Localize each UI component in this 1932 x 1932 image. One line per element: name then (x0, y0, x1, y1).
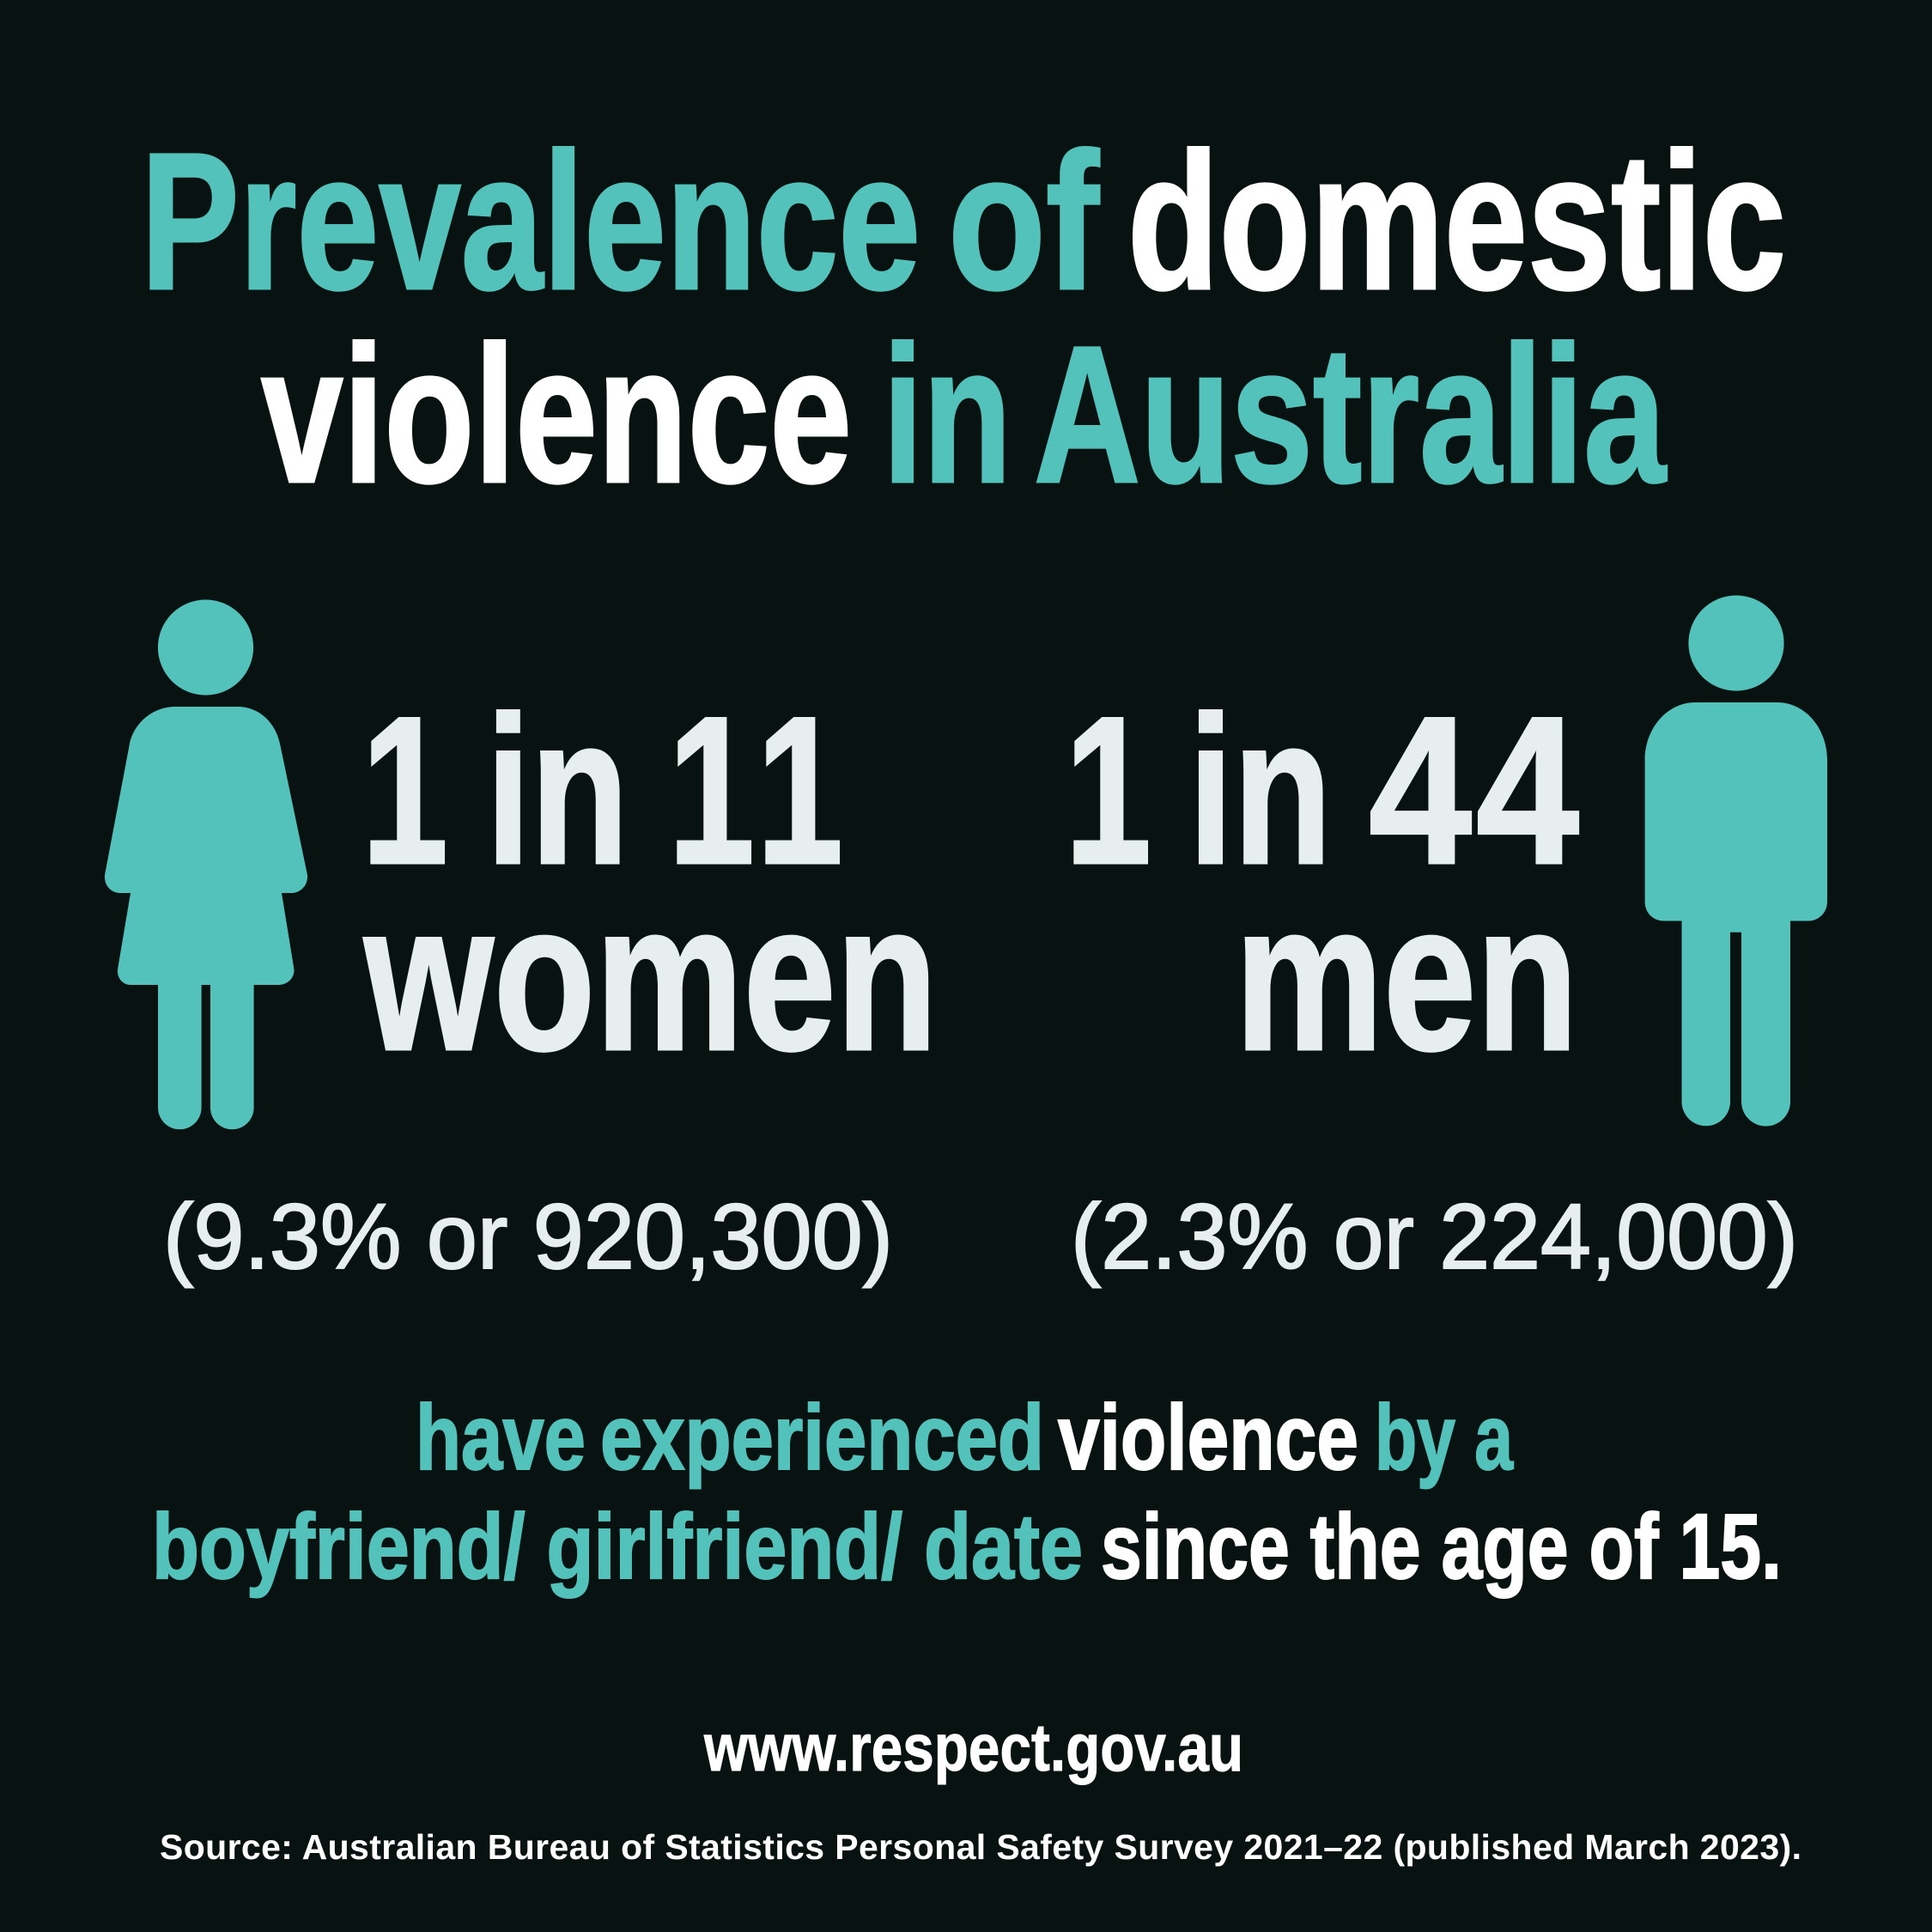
message: boyfriend/ girlfriend/ date (152, 1494, 1083, 1598)
stat: 1 in 44 men: 1 (1065, 672, 1151, 908)
stat detail: men: (2.3% or 224,000) (1071, 1184, 1798, 1288)
stat: 1 in 11 women: women (363, 859, 938, 1094)
title: of (948, 113, 1100, 331)
message: by a (1375, 1385, 1514, 1489)
stat: 1 in 44 men: 4 (1369, 672, 1472, 908)
message: violence (1058, 1385, 1358, 1489)
stat: 1 in 44 men: in (1188, 672, 1332, 908)
stat: 1 in 11 women (361, 672, 938, 1094)
icon: woman (105, 599, 307, 1129)
stat: 1 in 11 women: 1 (668, 672, 755, 908)
stat: 1 in 44 men (1065, 672, 1579, 1094)
message: experienced (600, 1385, 1044, 1489)
message: since the age of 15. (1101, 1494, 1782, 1598)
title (141, 113, 1786, 524)
website: www.respect.gov.au (703, 1710, 1243, 1785)
title: Prevalence (141, 113, 920, 331)
source: Source: Australian Bureau of Statistics Personal Safety Survey 2021–22 (published March 2023). (160, 1827, 1801, 1867)
icon: man (1645, 595, 1827, 1127)
message (152, 1385, 1782, 1598)
stat: 1 in 44 men: men (1235, 859, 1578, 1094)
message: have (416, 1385, 586, 1489)
stat: 1 in 11 women: 1 (361, 672, 448, 908)
title: violence (261, 307, 852, 524)
stat detail: women: (9.3% or 920,300) (163, 1184, 893, 1288)
stat: 1 in 44 men: 4 (1476, 672, 1579, 908)
title: in (883, 307, 1012, 524)
stat: 1 in 11 women: in (486, 672, 629, 908)
stat: 1 in 11 women: 1 (756, 672, 843, 908)
title: Australia (1034, 307, 1667, 524)
